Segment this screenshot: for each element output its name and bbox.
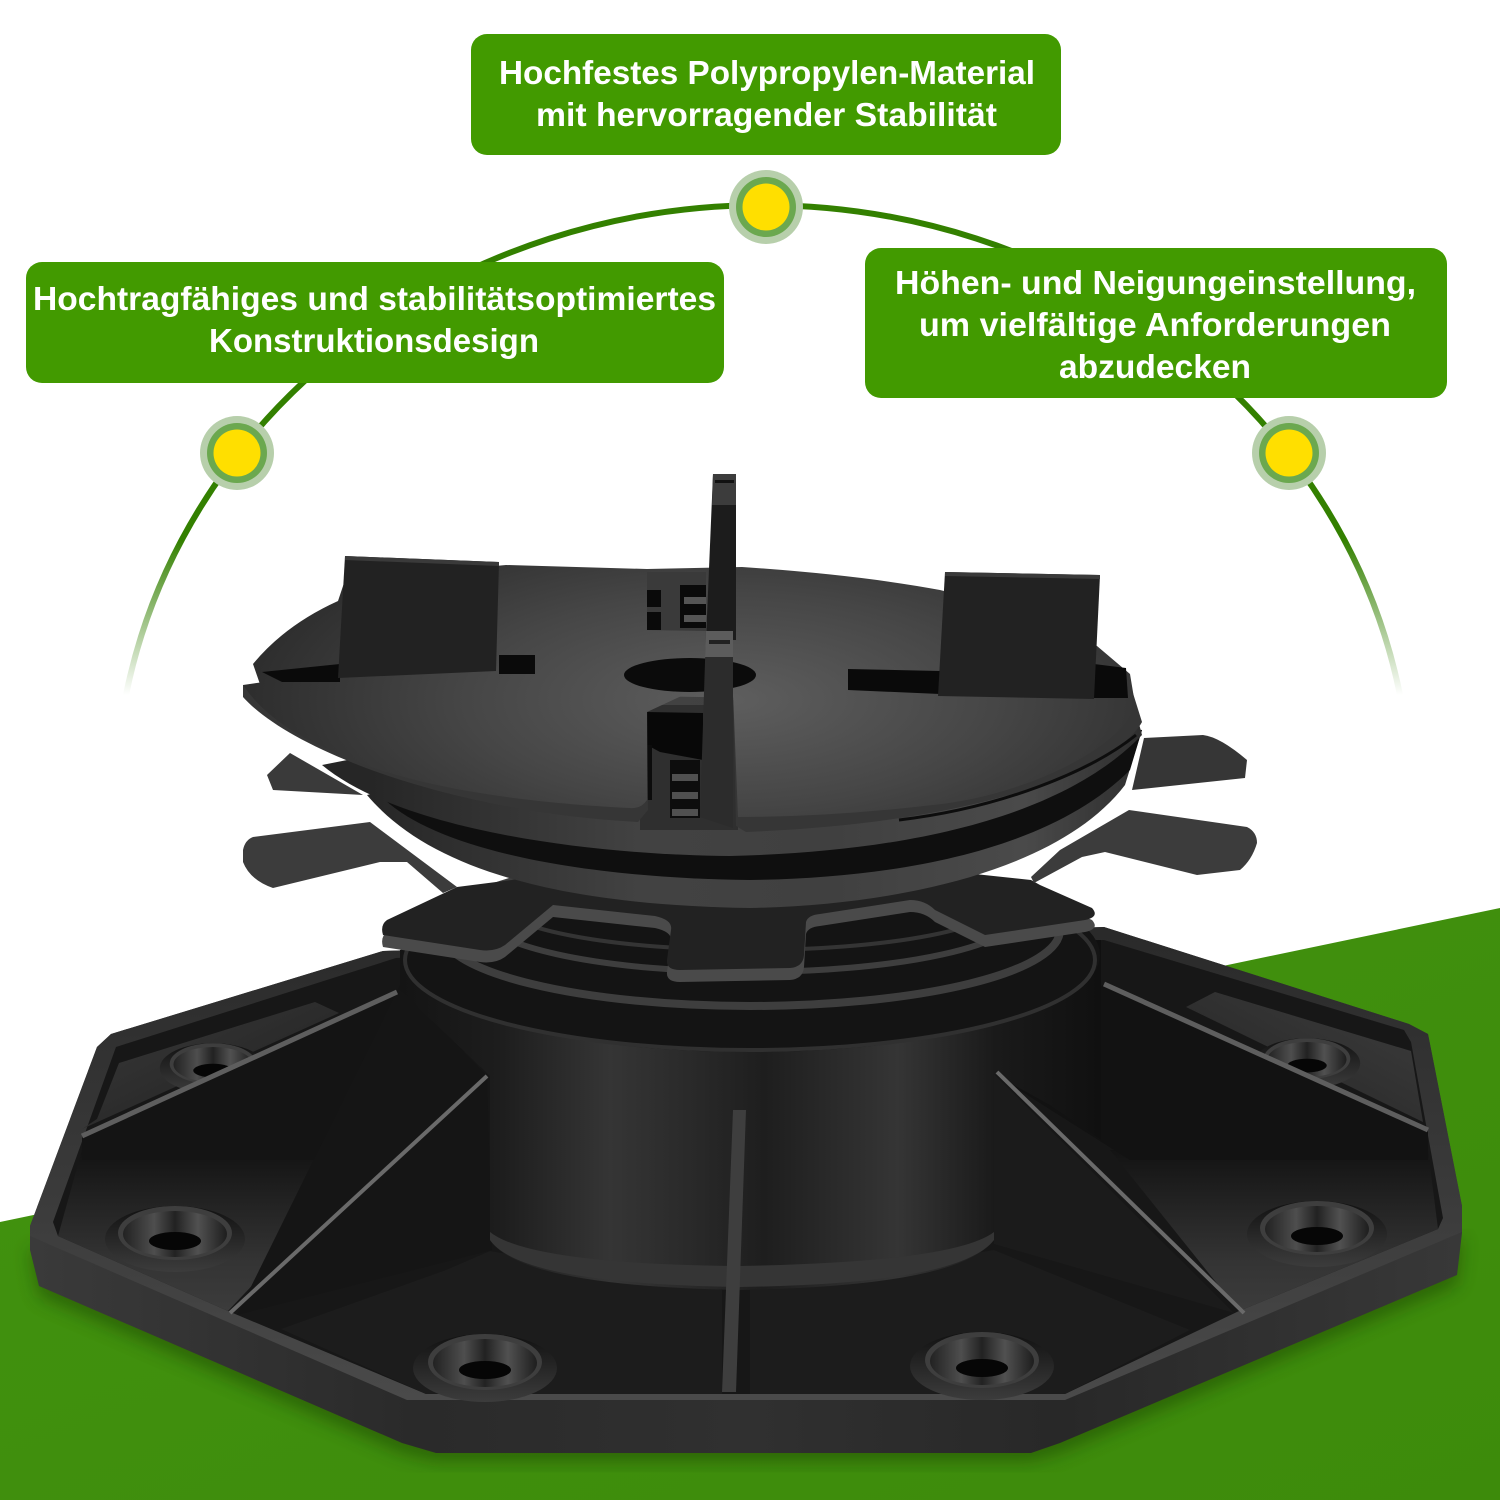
callout: adjustment: um vielfältige Anforderungen — [919, 306, 1391, 343]
screw holes: front — [105, 1201, 1387, 1402]
callout: design — [26, 262, 724, 383]
fin: front centre — [700, 631, 733, 828]
screw hole: top left — [160, 1043, 266, 1093]
callout: material: Hochfestes Polypropylen-Material — [499, 54, 1035, 91]
background: green ground — [0, 908, 1500, 1500]
shadow on ground — [30, 1240, 1462, 1461]
fin: right block — [938, 572, 1100, 699]
callout: adjustment: Höhen- und Neigungeinstellung, — [895, 264, 1416, 301]
marker: left — [200, 416, 274, 490]
front gap with adjusting teeth — [640, 705, 738, 830]
base walls between ribs — [82, 984, 1428, 1315]
front plate left — [243, 670, 690, 808]
fin: rear centre — [706, 474, 736, 640]
screw hole: top right — [1254, 1038, 1360, 1088]
column foot ring — [490, 1232, 994, 1287]
octagonal base — [30, 927, 1462, 1453]
tab: middle left — [243, 822, 457, 893]
column — [400, 940, 1101, 1290]
callout: design: Hochtragfähiges und stabilitätsoptimiertes — [33, 280, 716, 317]
locking tabs — [243, 735, 1257, 893]
tab: upper left — [267, 753, 363, 795]
callout: adjustment: abzudecken — [1059, 348, 1251, 385]
front plate right — [733, 691, 1136, 817]
callout: adjustment — [865, 248, 1447, 398]
stacked rings under the plate — [322, 690, 1142, 908]
fin: left block — [338, 556, 499, 678]
ribs — [82, 984, 1428, 1392]
slots and gaps — [262, 572, 1128, 698]
callout: material: mit hervorragender Stabilität — [536, 96, 997, 133]
centre hole — [624, 658, 756, 692]
callout: material — [471, 34, 1061, 155]
arc connecting the callouts — [126, 205, 1400, 695]
tab: middle right — [1031, 810, 1257, 883]
collar rings — [400, 850, 1100, 1052]
plate edges — [243, 685, 1142, 832]
lower star flange — [382, 850, 1095, 982]
callout: design: Konstruktionsdesign — [209, 322, 539, 359]
marker: right — [1252, 416, 1326, 490]
rear plate — [253, 565, 1135, 704]
tab: upper right — [1132, 735, 1247, 790]
marker: top — [729, 170, 803, 244]
product: pedestal support — [30, 474, 1462, 1461]
